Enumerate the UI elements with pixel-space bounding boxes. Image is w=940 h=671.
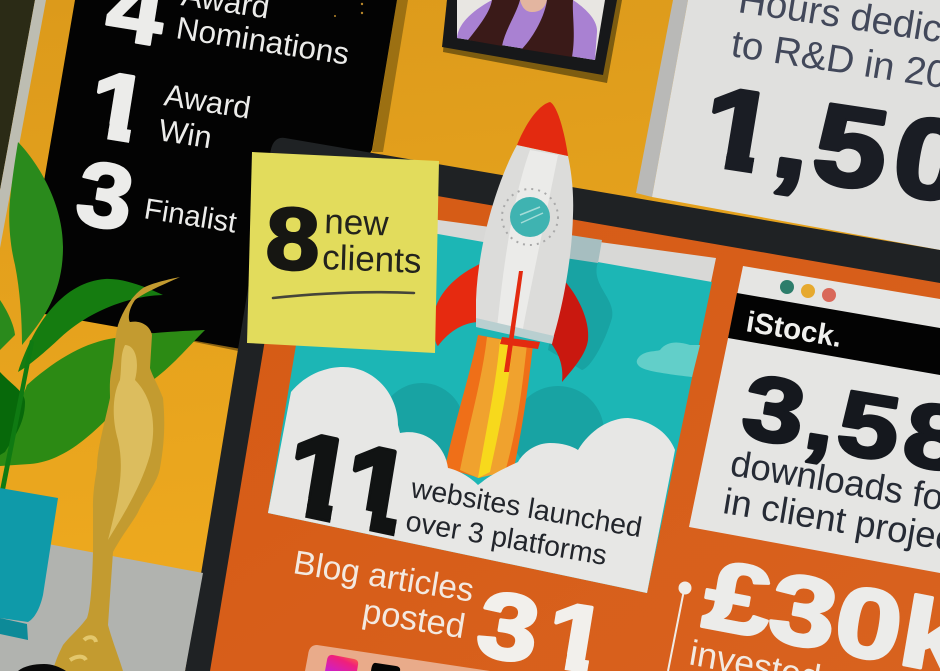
pin line: [668, 582, 692, 671]
icon: rocket: [433, 102, 588, 382]
floor: [0, 535, 203, 671]
figure: 8: 8: [264, 188, 321, 289]
hills behind the clouds: [380, 258, 612, 478]
blog articles text: [294, 550, 594, 671]
label: award nominations: Nominations: [174, 10, 352, 72]
label: blog articles posted: posted: [360, 592, 468, 646]
panel: research hours: [636, 0, 940, 250]
panel: orange dashboard: [210, 171, 940, 671]
hand-drawn underline: [273, 292, 414, 298]
icon: pot plant: [0, 142, 205, 640]
social icons tray: [305, 645, 490, 671]
panel: awards on black: [22, 0, 408, 352]
label: blog articles posted: Blog articles: [291, 544, 476, 610]
statue base: [18, 664, 66, 671]
label: websites launched: over 3 platforms: [403, 505, 609, 572]
label: finalist: Finalist: [142, 192, 239, 240]
sticky note: new clients: [247, 152, 439, 353]
logo text: iStock: iStock.: [744, 305, 844, 354]
label: award win: Win: [156, 112, 214, 155]
staff portrait in frame: [442, 0, 622, 83]
card: iStock downloads: [689, 266, 940, 573]
label: new clients: clients: [322, 238, 422, 281]
clouds: [268, 367, 675, 593]
label: award win: Award: [162, 77, 253, 126]
flame: [445, 335, 533, 478]
card: websites launched: [268, 204, 716, 593]
window dots: [780, 280, 836, 302]
panel: dark frame: [185, 138, 940, 671]
investment callout: [668, 539, 940, 671]
label: downloads in client projects: downloads fo: [728, 442, 940, 518]
label: websites launched: websites launched: [408, 472, 644, 544]
photo edge at far left: [0, 0, 46, 248]
pot: [0, 488, 58, 640]
label: new clients: new: [324, 202, 390, 244]
icon: golden award statue: [53, 277, 180, 671]
award count 1: 1: [82, 50, 156, 163]
award count 3: 3: [70, 142, 140, 251]
sky: small cloud: [637, 343, 700, 377]
figure: 11: 11: [277, 406, 420, 560]
